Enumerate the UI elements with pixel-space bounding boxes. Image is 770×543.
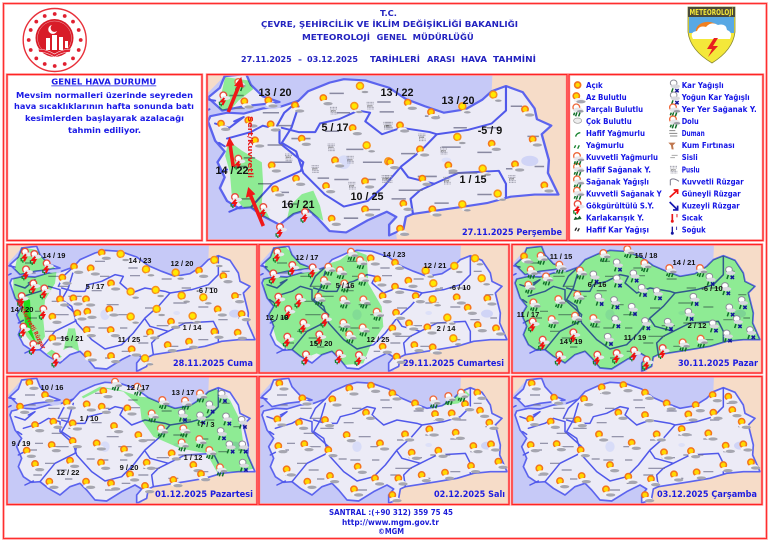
- legend labels: right column: Yer Yer Sağanak Y.: [681, 105, 757, 114]
- footer contact: ©MGM: [378, 527, 404, 536]
- temperatures: 11 / 17: [517, 310, 539, 319]
- temperatures: 1 / 12: [184, 453, 202, 462]
- legend labels: right column: Duman: [682, 129, 705, 138]
- panel: general weather text: GENEL HAVA DURUMU: [51, 78, 156, 86]
- temperatures: 12 / 18: [266, 313, 288, 322]
- legend labels: left column: Çok Bulutlu: [586, 117, 632, 126]
- temperatures: 2 / 14: [437, 324, 456, 333]
- logo: ministry seal: [23, 8, 86, 72]
- panel: general weather text: hava sıcaklıklarının hafta sonunda batı: [14, 102, 194, 111]
- legend labels: left column: Açık: [586, 81, 604, 90]
- panel: map 29.11.2025: [257, 243, 517, 376]
- legend labels: right column: Güneyli Rüzgar: [682, 190, 741, 198]
- panel: map 28.11.2025: [5, 243, 265, 376]
- temperatures: -6 / 10: [449, 283, 471, 292]
- temperatures: 13 / 20: [258, 87, 292, 99]
- legend labels: left column: Yağmurlu: [585, 141, 624, 150]
- panel: general weather text: Mevsim normalleri üzerinde seyreden: [16, 91, 193, 100]
- title: -: [298, 55, 302, 64]
- legend labels: right column: [681, 81, 757, 234]
- date caption: 30.11.2025 Pazar: [678, 359, 759, 369]
- legend labels: right column: Sisli: [682, 153, 698, 162]
- date caption: 27.11.2025 Perşembe: [462, 228, 562, 238]
- legend labels: right column: Kum Fırtınası: [682, 141, 735, 150]
- temperatures: -6 / 10: [196, 286, 218, 295]
- title: ÇEVRE, ŞEHİRCİLİK VE İKLİM DEĞİŞİKLİĞİ BAKANLIĞI: [261, 18, 518, 29]
- legend labels: right column: Kuzeyli Rüzgar: [682, 202, 740, 210]
- panel: general weather text: kesimlerden başlayarak azalacağı: [25, 114, 184, 123]
- title: 03.12.2025: [307, 55, 358, 64]
- panel border: [259, 376, 509, 504]
- temperatures: 16 / 21: [61, 334, 83, 343]
- title: TARİHLERİ: [370, 54, 420, 64]
- panel: map 30.11.2025: [510, 243, 770, 376]
- date caption: 03.12.2025 Çarşamba: [657, 490, 757, 500]
- panel border: [512, 376, 762, 504]
- wind warning note: Sert/Kuvvetli Rüzgar: [14, 298, 47, 350]
- legend labels: right column: Kuvvetli Rüzgar: [682, 178, 744, 186]
- temperatures: 11 / 19: [624, 333, 646, 342]
- legend labels: left column: Sağanak Yağışlı: [586, 178, 649, 186]
- panel: map 03.12.2025: [510, 375, 770, 508]
- temperatures: -7 / 3: [197, 420, 215, 429]
- temperatures: 14 / 19: [43, 251, 65, 260]
- legend labels: right column: Puslu: [682, 166, 700, 174]
- legend labels: left column: [585, 81, 662, 234]
- temperatures: 10 / 25: [350, 191, 384, 203]
- footer contact: http://www.mgm.gov.tr: [342, 518, 439, 527]
- title: ARASI: [427, 55, 455, 64]
- date caption: 01.12.2025 Pazartesi: [155, 490, 253, 500]
- legend labels: left column: Az Bulutlu: [586, 93, 627, 102]
- panel border: [207, 74, 567, 240]
- temperatures: 12 / 17: [127, 383, 149, 392]
- temperatures: [215, 87, 502, 211]
- panel border: [7, 244, 257, 373]
- panel: map 27.11.2025: [201, 70, 573, 242]
- panel border: [259, 244, 509, 373]
- temperatures: 13 / 17: [172, 388, 194, 397]
- temperatures: 6 / 16: [588, 280, 606, 289]
- legend labels: right column: Soğuk: [682, 226, 707, 234]
- title: [241, 9, 536, 64]
- legend labels: right column: Dolu: [682, 117, 699, 126]
- legend labels: left column: Hafif Sağanak Y.: [586, 166, 651, 174]
- panel border: [7, 376, 257, 504]
- temperatures: 1 / 15: [459, 174, 487, 186]
- panel: general weather text: tahmin ediliyor.: [68, 126, 141, 135]
- panel: map 02.12.2025: [257, 375, 517, 508]
- panel border: [512, 244, 762, 373]
- temperatures: 14 / 23: [129, 256, 151, 265]
- temperatures: 14 / 19: [560, 337, 582, 346]
- temperatures: 10 / 16: [41, 383, 63, 392]
- temperatures: 12 / 22: [57, 468, 79, 477]
- temperatures: 11 / 25: [118, 335, 140, 344]
- temperatures: 9 / 19: [12, 439, 30, 448]
- title: TAHMİNİ: [493, 54, 536, 64]
- date caption: 28.11.2025 Cuma: [173, 359, 253, 369]
- temperatures: 12 / 17: [296, 253, 318, 262]
- title: T.C.: [380, 9, 397, 18]
- temperatures: 9 / 20: [120, 463, 138, 472]
- temperatures: 13 / 22: [380, 87, 414, 99]
- temperatures: [517, 251, 723, 346]
- temperatures: 11 / 15: [550, 252, 572, 261]
- temperatures: 14 / 23: [383, 250, 405, 259]
- legend labels: left column: Gökgürültülü S.Y.: [586, 202, 654, 210]
- temperatures: 5 / 17: [321, 122, 349, 134]
- date caption: 02.12.2025 Salı: [434, 490, 505, 500]
- panel: legend: [569, 74, 763, 240]
- legend labels: left column: Kuvvetli Sağanak Y: [586, 190, 662, 198]
- temperatures: 5 / 16: [336, 281, 354, 290]
- temperatures: 12 / 20: [171, 259, 193, 268]
- legend icons: [573, 80, 680, 235]
- temperatures: 13 / 20: [441, 95, 475, 107]
- legend labels: left column: Kuvvetli Yağmurlu: [586, 153, 658, 162]
- legend labels: left column: Hafif Kar Yağışı: [586, 226, 649, 234]
- temperatures: [266, 250, 471, 348]
- title: METEOROLOJİ: [302, 32, 370, 42]
- temperatures: 15 / 18: [635, 251, 657, 260]
- title: MÜDÜRLÜĞÜ: [413, 31, 474, 42]
- legend labels: left column: Hafif Yağmurlu: [586, 129, 645, 138]
- wind arrows: [226, 78, 263, 226]
- temperatures: -5 / 9: [478, 125, 502, 137]
- title: 27.11.2025: [241, 55, 292, 64]
- temperatures: -6 / 10: [701, 284, 723, 293]
- temperatures: 14 / 22: [215, 165, 249, 177]
- temperatures: 5 / 17: [86, 282, 104, 291]
- date caption: 29.11.2025 Cumartesi: [403, 359, 504, 369]
- temperatures: 2 / 12: [688, 321, 706, 330]
- temperatures: 12 / 21: [424, 261, 446, 270]
- footer contact: [329, 508, 453, 536]
- temperatures: 16 / 21: [281, 199, 315, 211]
- legend labels: left column: Karlakarışık Y.: [586, 214, 644, 222]
- temperatures: 1 / 10: [80, 414, 98, 423]
- title: GENEL: [377, 33, 407, 42]
- title: HAVA: [461, 55, 488, 64]
- legend labels: right column: Sıcak: [682, 214, 704, 222]
- temperatures: 15 / 20: [310, 339, 332, 348]
- legend labels: right column: Kar Yağışlı: [682, 81, 724, 90]
- logo: meteorology shield: METEOROLOJİ: [690, 8, 734, 17]
- temperatures: 14 / 21: [673, 258, 695, 267]
- temperatures: [12, 383, 215, 477]
- footer contact: SANTRAL :(+90 312) 359 75 45: [329, 508, 453, 517]
- legend labels: left column: Parçalı Bulutlu: [586, 105, 643, 114]
- wind warning note: Sert/Kuvvetli: [246, 116, 254, 178]
- panel: general weather text: [7, 74, 202, 240]
- temperatures: [11, 251, 218, 344]
- panel: map 01.12.2025: [5, 375, 265, 508]
- temperatures: 12 / 25: [367, 335, 389, 344]
- logo: meteorology shield: [688, 7, 735, 63]
- temperatures: 1 / 14: [183, 323, 202, 332]
- temperatures: 14 / 20: [11, 305, 33, 314]
- legend labels: right column: Yoğun Kar Yağışlı: [681, 93, 750, 102]
